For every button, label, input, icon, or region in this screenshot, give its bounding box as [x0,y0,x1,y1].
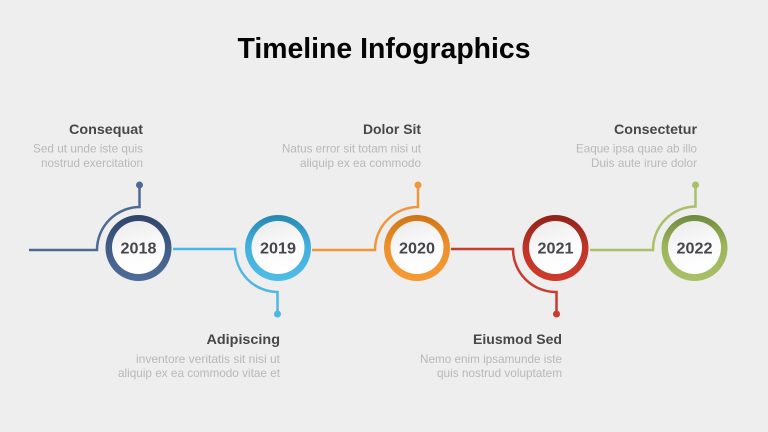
text: Consectetur: Consectetur [614,122,697,138]
text: Dolor Sit: aliquip ex ea commodo [300,156,421,170]
step 2021 [420,215,588,380]
text: Dolor Sit: Natus error sit totam nisi ut [282,142,422,156]
connector 2019 [173,249,281,318]
text: Eiusmod Sed: quis nostrud voluptatem [437,366,562,380]
text: Consectetur [576,122,697,170]
badge 2019 [245,215,311,281]
step 2019 [118,215,311,380]
step 2020 [282,122,450,281]
connector 2022 [590,182,699,250]
text: Consectetur: Duis aute irure dolor [591,156,697,170]
step 2022 [576,122,728,281]
badge 2018: 2018 [120,240,157,258]
text: Eiusmod Sed: Eiusmod Sed [473,332,562,348]
text: Adipiscing [118,332,281,380]
text: Eiusmod Sed [420,332,562,380]
text: Dolor Sit: Dolor Sit [363,122,421,138]
connector 2020 [312,182,422,250]
text: Consequat [33,122,143,170]
badge 2022: 2022 [676,240,713,258]
text: Dolor Sit [282,122,422,170]
text: Eiusmod Sed: Nemo enim ipsamunde iste [420,352,562,366]
badge 2020: 2020 [399,240,435,258]
text: Adipiscing: aliquip ex ea commodo vitae et [118,366,281,380]
text: Adipiscing: inventore veritatis sit nisi ut [136,352,281,366]
badge 2018 [106,215,172,281]
badge 2020 [384,215,450,281]
badge 2019: 2019 [260,240,296,258]
connector 2018 [29,182,143,250]
text: Consequat: Sed ut unde iste quis [33,142,143,156]
badge 2021: 2021 [538,240,574,258]
text: Consequat: Consequat [69,122,143,138]
step 2018 [29,122,172,281]
connector 2021 [451,249,560,318]
text: Adipiscing: Adipiscing [206,332,280,348]
badge 2022 [662,215,728,281]
text: Consectetur: Eaque ipsa quae ab illo [576,142,697,156]
title: Timeline Infographics [238,33,530,65]
text: Consequat: nostrud exercitation [41,156,143,170]
badge 2021 [522,215,588,281]
